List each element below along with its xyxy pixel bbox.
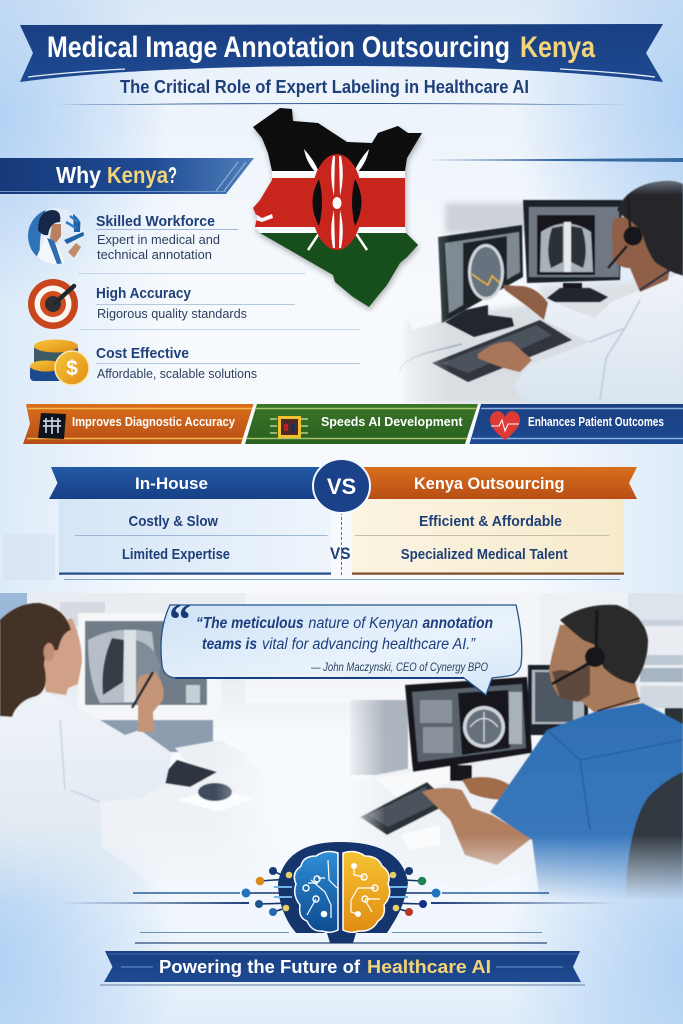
- left monitor: [438, 225, 523, 337]
- Maasai shield: [311, 154, 363, 250]
- icon: clinician with microscope: [28, 208, 85, 265]
- closing text: Healthcare AI: [367, 956, 491, 977]
- heading: High Accuracy: [96, 286, 192, 302]
- photo: radiologist at monitor, left: [0, 602, 234, 878]
- faint building backdrop left: [3, 534, 55, 580]
- description: Affordable, scalable solutions: [97, 367, 257, 381]
- subtitle: The Critical Role of Expert Labeling in Healthcare AI: [120, 76, 529, 97]
- desk: [102, 770, 232, 852]
- closing text: [159, 956, 491, 977]
- keyboard: [432, 320, 572, 382]
- icon: AI brain logo: [242, 842, 440, 943]
- panel: kenya outsourcing: [352, 467, 637, 575]
- why kenya banner: [0, 158, 254, 194]
- item: skilled workforce: [28, 208, 238, 265]
- main monitor: [405, 677, 532, 781]
- spears: [304, 149, 369, 250]
- coat: [513, 272, 683, 404]
- title banner: [20, 24, 663, 82]
- face: [40, 618, 82, 695]
- top right rule: [425, 158, 683, 162]
- lower hand: [478, 342, 532, 372]
- why kenya text: [56, 162, 177, 188]
- pointing hand: [503, 285, 548, 320]
- icon: heart with pulse: [490, 411, 520, 440]
- shelves: [637, 620, 683, 726]
- title text: Medical Image Annotation Outsourcing: [47, 31, 510, 64]
- closing banner: [100, 951, 585, 985]
- icon: target: [28, 279, 78, 329]
- why kenya text: ?: [168, 162, 177, 188]
- attribution: — John Maczynski, CEO of Cynergy BPO: [310, 662, 488, 674]
- footer rules: [62, 893, 620, 943]
- neck and face: [549, 625, 640, 712]
- mouse pad: [180, 793, 240, 812]
- hair: [0, 603, 71, 717]
- monitor: [78, 613, 222, 720]
- panel: kenya outsourcing: Kenya Outsourcing: [414, 474, 564, 493]
- panel: in-house: Costly & Slow: [128, 513, 218, 530]
- photo: technician with headset, right: [350, 605, 683, 900]
- benefit ribbon: speeds ai development: Speeds AI Development: [321, 415, 463, 429]
- why kenya text: Why: [56, 162, 101, 188]
- faded side screens: [350, 700, 408, 775]
- left hemisphere: [294, 852, 338, 932]
- subtitle rule: [57, 103, 627, 105]
- icon: x-ray film: [38, 413, 66, 439]
- description: Expert in medical and: [97, 233, 220, 247]
- why kenya text: Kenya: [107, 162, 168, 188]
- desk: [360, 752, 536, 868]
- item: cost effective: [30, 340, 360, 385]
- benefit ribbon: improves diagnostic accuracy: Improves Diagnostic Accuracy: [72, 415, 235, 429]
- coat: [0, 692, 172, 878]
- vs badge: [313, 459, 370, 513]
- pen: [132, 672, 153, 708]
- chair: [625, 772, 683, 900]
- title text: Kenya: [520, 31, 595, 64]
- benefit ribbon: enhances patient outcomes: [470, 404, 683, 444]
- face and neck: [612, 215, 672, 292]
- quote mark: “: [169, 595, 191, 644]
- icon: coins: [30, 340, 89, 385]
- quote text: nature of Kenyan: [308, 615, 418, 632]
- panel: kenya outsourcing: Specialized Medical Talent: [401, 546, 568, 563]
- papers and cable: [400, 344, 462, 372]
- beard: [552, 660, 590, 702]
- panel: in-house: [49, 467, 331, 575]
- description: [97, 233, 220, 262]
- panel: kenya outsourcing: Efficient & Affordable: [419, 513, 562, 530]
- mouse: [198, 783, 232, 801]
- lower photo wall backdrop: [0, 593, 683, 706]
- heading: Skilled Workforce: [96, 214, 215, 230]
- panel: in-house: Limited Expertise: [122, 546, 230, 563]
- background haze: [406, 200, 639, 404]
- mid vs label: VS: [330, 544, 350, 563]
- forearm and hand: [137, 672, 164, 732]
- photo: doctor at monitors: [400, 181, 683, 404]
- quote text: annotation: [422, 615, 493, 632]
- icon: coins: $: [66, 357, 78, 380]
- description: Rigorous quality standards: [97, 307, 247, 321]
- description: technical annotation: [97, 248, 212, 262]
- keyboard: [157, 760, 217, 787]
- icon: chip: [270, 416, 308, 438]
- right hemisphere: [343, 852, 390, 932]
- vs badge: VS: [327, 474, 356, 499]
- quote text: [196, 615, 493, 653]
- quote text: teams is: [202, 636, 257, 653]
- keyboard: [360, 782, 450, 835]
- headset: [624, 226, 642, 246]
- quote text: “The meticulous: [196, 615, 304, 632]
- panel: why kenya list: [28, 208, 360, 385]
- near arm and hand: [422, 788, 532, 865]
- quote callout: [161, 595, 522, 695]
- right monitor: [523, 200, 622, 302]
- far hand: [462, 777, 510, 800]
- comparison: in-house vs kenya outsourcing: [49, 459, 637, 580]
- ear: [44, 643, 54, 661]
- item: high accuracy: [28, 279, 295, 329]
- benefit ribbon: speeds ai development: [245, 404, 478, 444]
- scrub shirt: [490, 703, 683, 900]
- closing text: Powering the Future of: [159, 956, 361, 977]
- panel: in-house: In-House: [135, 474, 208, 493]
- heading: Cost Effective: [96, 346, 189, 362]
- benefit ribbon: improves diagnostic accuracy: [23, 404, 254, 444]
- printer: [174, 740, 234, 768]
- headset: [585, 647, 605, 667]
- monitor stand: [100, 720, 214, 753]
- connector traces and nodes: [242, 867, 440, 916]
- quote text: vital for advancing healthcare AI.”: [262, 636, 476, 653]
- map of Kenya flag: [250, 100, 430, 313]
- hair: [560, 605, 648, 684]
- hair: [617, 181, 683, 276]
- second monitor: [528, 665, 588, 735]
